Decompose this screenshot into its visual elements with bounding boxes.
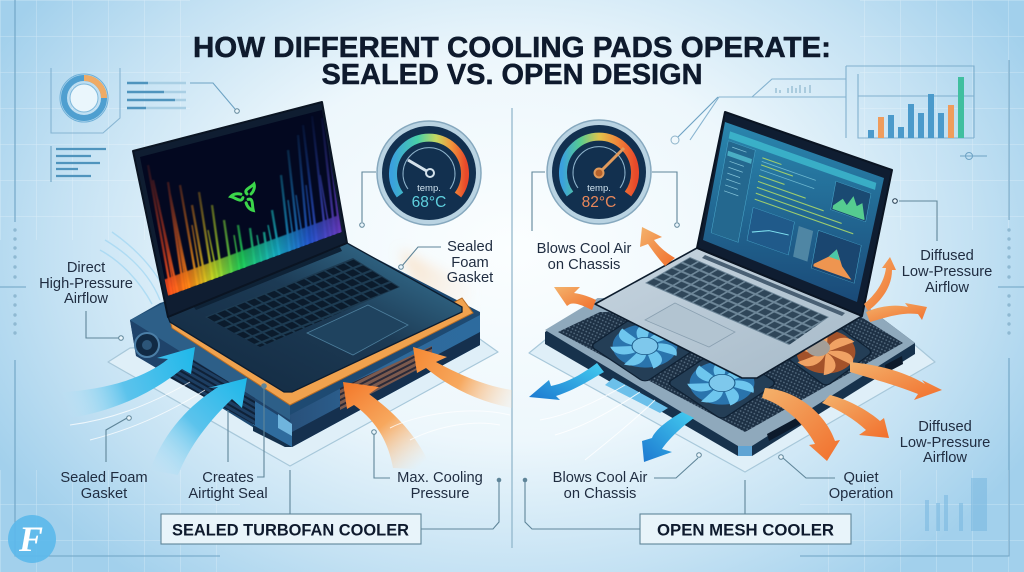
label: diffused airflow top: Airflow: [925, 280, 969, 296]
label: blows cool air top: Blows Cool Air: [537, 241, 631, 257]
label: sealed foam gasket right: Sealed: [447, 239, 493, 255]
callout line: airflow: [86, 311, 123, 340]
chart decoration: bottom right faded bars: [925, 478, 987, 531]
label: diffused airflow bottom: Diffused: [918, 419, 972, 435]
arrow: blue airflow 2: [150, 378, 247, 475]
donut chart decoration: [51, 68, 120, 133]
callout line: diffused: [893, 199, 937, 241]
razer logo: [231, 184, 257, 211]
laptop screen: [697, 112, 892, 316]
arrow: blue exhaust left: [529, 363, 604, 400]
arrow: orange exhaust top left: [640, 227, 675, 266]
sealed foam gasket: [170, 298, 473, 405]
glow: airflow and gasket: [100, 232, 470, 320]
label: diffused airflow top: Diffused: [920, 248, 974, 264]
gauge: 82°C: [547, 120, 651, 224]
label: direct high-pressure airflow: High-Pressure: [39, 276, 133, 292]
box: sealed turbofan cooler: [161, 470, 501, 544]
arrow: orange exhaust left: [554, 287, 596, 310]
label: direct high-pressure airflow: Airflow: [64, 291, 108, 307]
chart decoration: top right bar chart: [671, 66, 987, 160]
ground platform: open: [529, 340, 935, 472]
cooler body: sealed: [130, 245, 480, 447]
label: sealed foam gasket: Sealed Foam: [60, 470, 148, 486]
fan: blue left: [590, 309, 700, 383]
label: creates airtight seal: Airtight Seal: [188, 486, 268, 502]
arrow: orange exhaust mid: [822, 395, 889, 438]
gauge: 82°C: temp.: [587, 183, 611, 194]
airflow streaks: [540, 385, 655, 460]
laptop base: [168, 243, 462, 392]
box: open mesh cooler: [523, 478, 851, 544]
bar list decoration: [51, 83, 239, 182]
callout line: blows: [654, 453, 701, 478]
ground platform: sealed: [108, 332, 498, 466]
arrow: orange exhaust front: [762, 388, 840, 461]
label: sealed foam gasket: Gasket: [81, 486, 127, 502]
arrow: blue airflow 1: [62, 347, 195, 418]
logo badge: F: [18, 519, 43, 559]
gauge: 82°C: 82°C: [582, 194, 616, 211]
labels: open cooler callouts: [537, 199, 992, 502]
callout line: gasket: [399, 247, 441, 269]
callout lines: gauge right: [532, 172, 679, 231]
label: direct high-pressure airflow: Direct: [67, 260, 105, 276]
callout lines: airtight: [228, 384, 266, 477]
label: diffused airflow bottom: Airflow: [923, 450, 967, 466]
arrow: orange exhaust up: [864, 257, 896, 311]
arrow: blue exhaust front: [642, 412, 694, 462]
cooler body: open: [545, 298, 915, 456]
title: HOW DIFFERENT COOLING PADS OPERATE:: [193, 32, 831, 64]
fan: orange right: [779, 317, 873, 387]
box: open mesh cooler: OPEN MESH COOLER: [657, 522, 834, 540]
laptop: sealed, Razer: [133, 102, 462, 392]
logo badge: [8, 515, 56, 563]
labels: sealed cooler callouts: [39, 239, 493, 502]
label: diffused airflow bottom: Low-Pressure: [900, 435, 990, 451]
gauge: 68°C: [377, 121, 481, 225]
callout line: gauge left: [360, 172, 376, 227]
dashboard on screen: [711, 131, 876, 284]
label: blows cool air top: on Chassis: [548, 257, 620, 273]
label: creates airtight seal: Creates: [202, 470, 254, 486]
label: sealed foam gasket right: Foam: [451, 255, 489, 271]
label: sealed foam gasket right: Gasket: [447, 270, 493, 286]
label: max cooling pressure: Pressure: [411, 486, 469, 502]
callout line: sealed foam: [106, 416, 131, 462]
label: diffused airflow top: Low-Pressure: [902, 264, 992, 280]
laptop: open, silver: [595, 112, 892, 378]
airflow streaks: [70, 382, 510, 440]
panel: sealed turbofan cooler: [62, 102, 512, 475]
arrow: orange airflow 1: [343, 382, 432, 470]
laptop screen: [133, 102, 347, 317]
fan: blue front: [667, 346, 777, 420]
callout line: pressure: [372, 430, 390, 478]
arrow: orange airflow 2: [413, 347, 512, 408]
box: sealed turbofan cooler: SEALED TURBOFAN COOLER: [172, 522, 409, 540]
label: quiet operation: Quiet: [843, 470, 879, 486]
arrow: orange exhaust right: [850, 362, 942, 400]
title: SEALED VS. OPEN DESIGN: [322, 59, 702, 91]
label: blows cool air bottom: on Chassis: [564, 486, 636, 502]
label: blows cool air bottom: Blows Cool Air: [553, 470, 647, 486]
title: [193, 32, 831, 91]
laptop base: [595, 248, 862, 378]
label: quiet operation: Operation: [829, 486, 893, 502]
arrow: orange exhaust upper right: [866, 303, 927, 322]
panel: open mesh cooler: [529, 112, 942, 472]
callout line: quiet: [779, 455, 835, 478]
label: max cooling pressure: Max. Cooling: [397, 470, 483, 486]
gauge: 68°C: 68°C: [412, 194, 446, 211]
gauge: 68°C: temp.: [417, 183, 441, 194]
